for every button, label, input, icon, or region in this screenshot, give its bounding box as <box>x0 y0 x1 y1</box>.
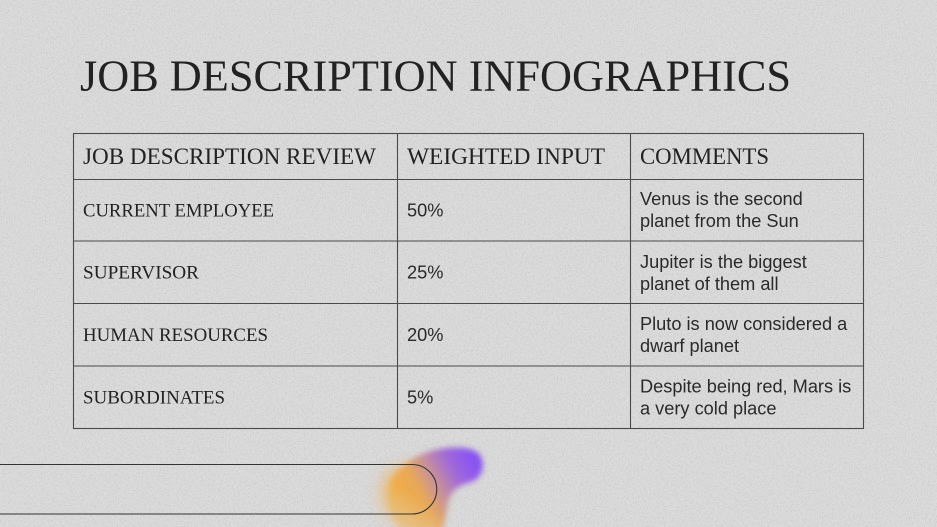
header row <box>83 144 769 169</box>
row: current employee: 50% <box>407 200 443 220</box>
row: human resources: HUMAN RESOURCES <box>83 326 268 346</box>
row: supervisor: planet of them all <box>640 274 779 294</box>
row: current employee: planet from the Sun <box>640 211 799 231</box>
row: subordinates <box>83 376 851 418</box>
row: subordinates: Despite being red, Mars is <box>640 376 851 396</box>
row: human resources: dwarf planet <box>640 336 739 356</box>
row: human resources: 20% <box>407 325 443 345</box>
header row: JOB DESCRIPTION REVIEW <box>83 144 376 169</box>
row: current employee <box>83 189 803 231</box>
row: human resources: Pluto is now considered a <box>640 314 848 334</box>
table <box>74 134 864 428</box>
row: current employee: CURRENT EMPLOYEE <box>83 202 274 222</box>
row: subordinates: a very cold place <box>640 398 776 418</box>
header row: WEIGHTED INPUT <box>407 144 605 169</box>
row: supervisor: 25% <box>407 262 443 282</box>
row: supervisor: SUPERVISOR <box>83 264 200 284</box>
row: supervisor: Jupiter is the biggest <box>640 252 807 272</box>
table grid <box>74 134 864 428</box>
header row: COMMENTS <box>640 144 769 169</box>
row: human resources <box>83 314 848 356</box>
row: subordinates: 5% <box>407 388 433 408</box>
pill outline <box>0 464 437 514</box>
row: supervisor <box>83 252 807 294</box>
row: current employee: Venus is the second <box>640 189 803 209</box>
gradient blob <box>380 448 483 527</box>
row: subordinates: SUBORDINATES <box>83 388 225 408</box>
title: JOB DESCRIPTION INFOGRAPHICS <box>80 52 791 100</box>
